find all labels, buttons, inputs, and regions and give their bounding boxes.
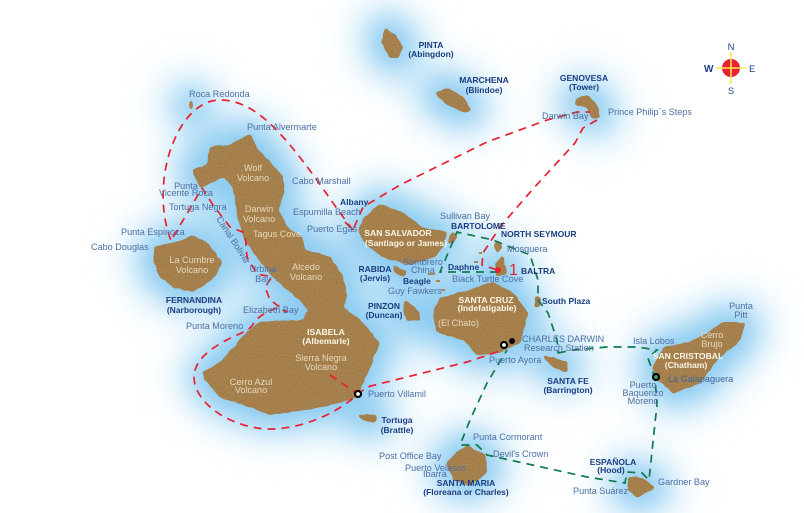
place labels: Puerto Villamil [368, 389, 426, 399]
place labels: Devil's Crown [493, 449, 548, 459]
island name labels: PINZON [368, 301, 400, 311]
port markers [355, 267, 659, 397]
labels on islands: (Indefatigable) [458, 303, 516, 313]
place labels: Canal Bolivar [214, 215, 252, 265]
labels on islands: (Albemarle) [302, 336, 350, 346]
island name labels: BALTRA [521, 266, 555, 276]
island name labels: PINTA [419, 40, 443, 50]
place labels: Baquerizo [623, 388, 663, 398]
place labels: Punta [174, 181, 199, 191]
place labels: Roca Redonda [189, 89, 251, 99]
labels on islands: (Santiago or James) [365, 238, 447, 248]
islands [153, 28, 745, 497]
route number: 1 [509, 262, 518, 279]
compass: N [728, 42, 735, 53]
place labels: CHARLES DARWIN [522, 334, 604, 344]
place labels: Punta Moreno [186, 321, 243, 331]
place labels: Ibarra [423, 469, 448, 479]
place labels: Isla Lobos [633, 336, 675, 346]
labels on islands: Volcano [305, 362, 337, 372]
place labels: Mosquera [507, 244, 548, 254]
island name labels: RABIDA [358, 264, 392, 274]
island name labels [166, 40, 636, 497]
place labels: Research Station [524, 343, 594, 353]
place labels: Sombrero [403, 257, 443, 267]
island: Pinta [382, 28, 403, 58]
green route [440, 232, 657, 483]
labels on islands: Volcano [176, 265, 208, 275]
island: San Cristobal [653, 322, 745, 393]
labels on islands: Sierra Negra [295, 353, 348, 363]
place labels: Gardner Bay [658, 477, 710, 487]
place labels: Punta Suárez [573, 486, 629, 496]
place labels: La Galapaguera [668, 374, 734, 384]
island: North Seymour [494, 241, 503, 253]
island name labels: South Plaza [542, 296, 590, 306]
island name labels: (Blindoe) [466, 85, 503, 95]
compass [704, 42, 755, 97]
labels on islands: Darwin [245, 204, 273, 214]
place labels: Pitt [734, 310, 748, 320]
place labels: Darwin Bay [542, 111, 589, 121]
place labels: Punta [729, 301, 754, 311]
compass: S [728, 86, 734, 97]
labels on islands: La Cumbre [170, 255, 214, 265]
marker: Puerto Baquerizo Moreno [653, 374, 659, 380]
labels on islands: (El Chato) [438, 318, 479, 328]
place labels [91, 89, 754, 496]
island: San Salvador [358, 204, 447, 265]
island name labels: (Floreana or Charles) [423, 487, 509, 497]
island name labels: (Abingdon) [408, 49, 454, 59]
island: Santa Maria [447, 446, 487, 485]
island name labels: (Brattle) [381, 425, 413, 435]
island name labels: (Barrington) [543, 385, 593, 395]
place labels: Urbina [250, 264, 277, 274]
small islets: Roca Redonda, Daphne, Beagle, Guy Fawkers [189, 101, 482, 291]
sea glow around islands [153, 28, 745, 497]
place labels: Post Office Bay [379, 451, 442, 461]
place labels: Puerto Velasco [405, 463, 466, 473]
place labels: Punta Cormorant [473, 432, 543, 442]
island name labels: Daphne [448, 262, 479, 272]
island: Fernandina [153, 236, 222, 292]
marker: Charles Darwin Research Station [509, 338, 515, 344]
island: South Plaza [534, 296, 540, 307]
compass: W [704, 64, 714, 75]
compass: E [749, 64, 755, 75]
place labels: Vicente Roca [159, 188, 214, 198]
island name labels: (Tower) [569, 82, 599, 92]
place labels: Elizabeth Bay [243, 305, 299, 315]
labels on islands: Alcedo [292, 262, 320, 272]
place labels: Punta Espinoza [121, 227, 186, 237]
island: Isabela [192, 134, 380, 415]
labels on islands: Cerro Azul [230, 377, 272, 387]
labels on islands: Wolf [244, 163, 262, 173]
place labels: Puerto Ayora [489, 355, 542, 365]
labels on islands: (Chatham) [665, 360, 707, 370]
labels on islands: Volcano [235, 385, 267, 395]
place labels: Puerto Egas [307, 224, 357, 234]
labels on islands [170, 163, 723, 395]
labels on islands: Cerro [701, 330, 723, 340]
island name labels: SANTA FE [547, 376, 589, 386]
labels on islands: SANTA CRUZ [459, 295, 513, 305]
place labels: Black Turtle Cove [452, 274, 523, 284]
labels on islands: Tagus Cove [253, 229, 301, 239]
marker: Puerto Ayora [501, 342, 507, 348]
island: Tortuga [358, 415, 377, 423]
island: Genovesa [575, 95, 600, 118]
place labels: Moreno [628, 396, 658, 406]
island: Pinzon [403, 300, 420, 320]
island: Baltra [495, 256, 507, 276]
labels on islands: ISABELA [307, 327, 345, 337]
place labels: Punta Alvermarte [247, 122, 317, 132]
island name labels: ESPAÑOLA [590, 457, 636, 467]
place labels: Puerto [630, 380, 656, 390]
marker: Baltra start [495, 267, 501, 273]
place labels: China [411, 265, 436, 275]
labels on islands: Volcano [237, 173, 269, 183]
labels on islands: SAN CRISTOBAL [653, 351, 723, 361]
place labels: Espumilla Beach [293, 207, 361, 217]
island: Marchena [435, 88, 471, 113]
place labels: Cabo Douglas [91, 242, 149, 252]
island: Rabida [393, 265, 407, 277]
island name labels: Tortuga [381, 415, 413, 425]
island name labels: Albany [340, 197, 369, 207]
island name labels: NORTH SEYMOUR [501, 229, 577, 239]
island name labels: Beagle [403, 276, 431, 286]
island name labels: BARTOLOME [451, 221, 506, 231]
labels on islands: SAN SALVADOR [364, 228, 433, 238]
wide faint sea glow [153, 28, 745, 497]
red route [163, 100, 597, 429]
marker: Puerto Villamil [355, 391, 361, 397]
island name labels: GENOVESA [560, 73, 608, 83]
island name labels: SANTA MARIA [437, 478, 495, 488]
place labels: Guy Fawkers [388, 286, 442, 296]
labels on islands: Volcano [290, 272, 322, 282]
place labels: Tortuga Negra [169, 202, 228, 212]
labels on islands: Volcano [243, 214, 275, 224]
island name labels: FERNANDINA [166, 295, 222, 305]
island name labels: (Hood) [597, 465, 625, 475]
island name labels: (Duncan) [366, 310, 403, 320]
place labels: Sullivan Bay [440, 211, 490, 221]
island name labels: (Jervis) [360, 273, 390, 283]
island name labels: (Narborough) [167, 305, 221, 315]
place labels: Prince Philip`s Steps [608, 107, 692, 117]
place labels: Bay [255, 274, 271, 284]
island: Espanola [628, 477, 655, 497]
island: Bartolome [447, 232, 457, 244]
island: Santa Fe [542, 355, 567, 372]
labels on islands: Brujo [701, 339, 723, 349]
island: Santa Cruz [433, 282, 528, 355]
place labels: Cabo Marshall [292, 176, 351, 186]
island name labels: MARCHENA [459, 75, 509, 85]
